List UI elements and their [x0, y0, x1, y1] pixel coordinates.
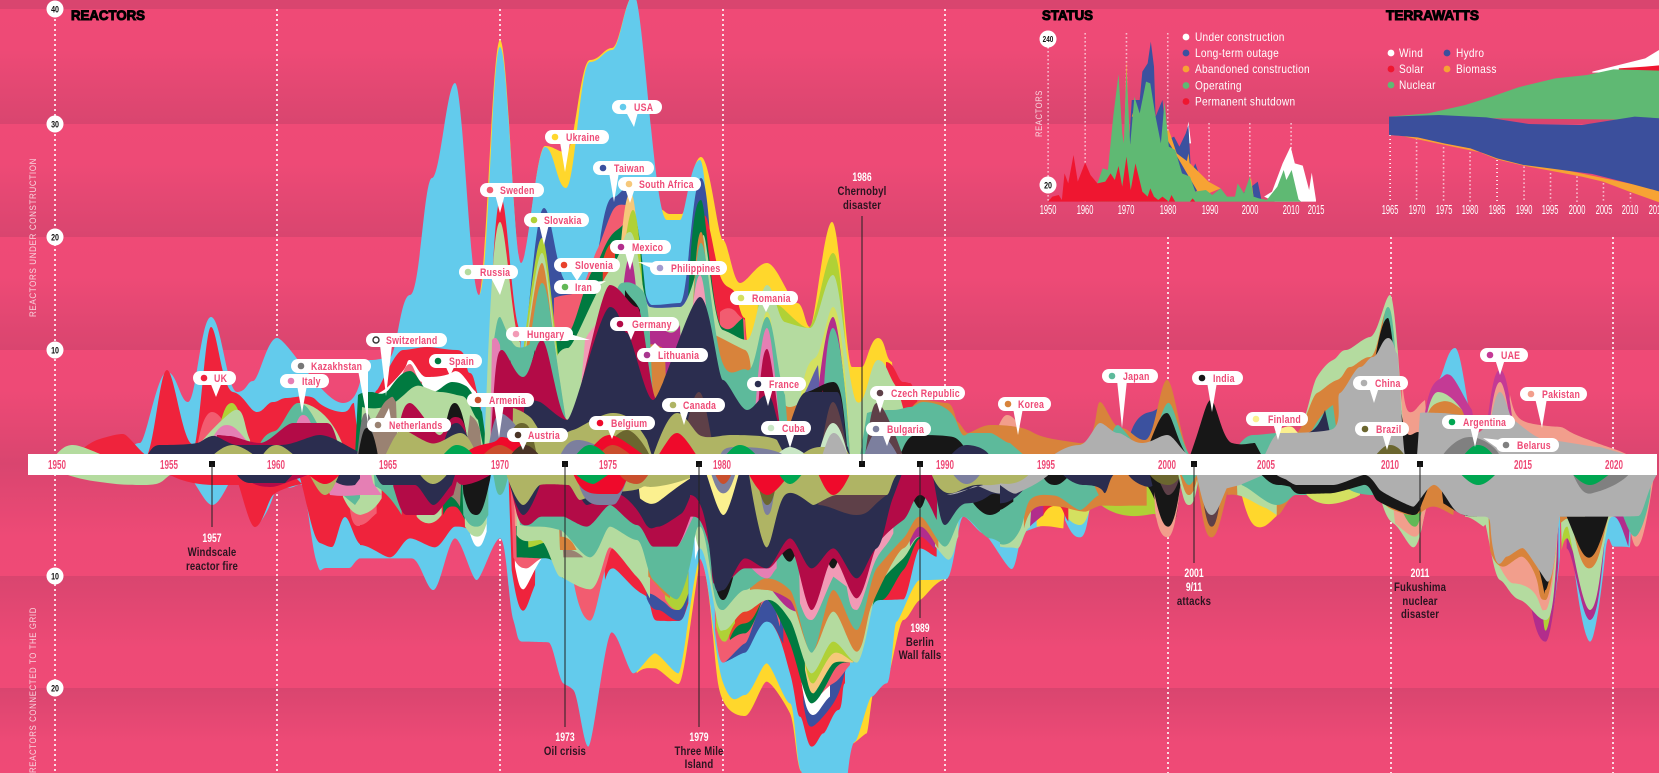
layer: Ukraine — [478, 0, 900, 456]
lower stream, 1979 to 1995 — [690, 470, 1040, 773]
label: Philippines: Philippines — [671, 263, 721, 275]
layer: Finland — [510, 403, 1300, 456]
lower stream, 1995 to 2005 — [1000, 475, 1320, 548]
label: Italy: Italy — [302, 376, 321, 388]
layer: Hungary — [575, 275, 716, 456]
label: Bulgaria — [866, 422, 931, 446]
event: 2011 Fukushima: nuclear — [1402, 595, 1438, 608]
label: Taiwan: Taiwan — [614, 163, 645, 175]
label: Korea — [998, 397, 1051, 435]
label: USA: USA — [634, 102, 653, 114]
terrawatts years: 1970 — [1409, 204, 1426, 218]
layer: Taiwan — [515, 178, 1170, 456]
axis title: under construction: REACTORS UNDER CONSTRUCTION — [28, 158, 38, 317]
terrawatts years: 1965 — [1382, 204, 1399, 218]
timeline years: 1980 — [713, 458, 731, 473]
terrawatts years: 1990 — [1516, 204, 1533, 218]
label: Czech Republic — [870, 386, 965, 413]
label: USA — [612, 100, 662, 127]
timeline years: 1975 — [599, 458, 617, 473]
terrawatts legend: Nuclear — [1399, 79, 1436, 92]
event: 1989 Berlin Wall: Berlin — [906, 636, 934, 649]
label: UK: UK — [214, 373, 228, 385]
terrawatts years: 2010 — [1622, 204, 1639, 218]
layer: Kazakhstan — [357, 413, 376, 456]
label: Japan — [1102, 369, 1158, 428]
layer: Iran — [600, 275, 652, 456]
y axis: 20 — [51, 231, 59, 243]
label: Hungary — [506, 327, 590, 341]
status legend: Abandoned construction — [1195, 63, 1310, 76]
area: under construction — [1185, 122, 1316, 202]
status axis and labels: 2000 — [1242, 204, 1259, 218]
label: Cuba: Cuba — [782, 423, 805, 435]
status legend — [1183, 31, 1310, 109]
terrawatts years: 2000 — [1569, 204, 1586, 218]
label: Slovenia — [554, 258, 620, 281]
event: 2011 Fukushima: disaster — [1401, 608, 1440, 621]
label: Finland — [1246, 412, 1308, 440]
timeline years: 1970 — [491, 458, 509, 473]
country labels — [193, 100, 1587, 452]
timeline years: 1995 — [1037, 458, 1055, 473]
status legend: Under construction — [1195, 31, 1285, 44]
layer: France — [147, 297, 1335, 456]
label: Spain — [429, 354, 482, 376]
event: 1986 Chernobyl: 1986 — [852, 172, 872, 184]
status legend: Long-term outage — [1195, 47, 1279, 60]
event: 2011 Fukushima — [1394, 461, 1447, 621]
label: Philippines — [638, 261, 727, 275]
label: Netherlands: Netherlands — [389, 420, 443, 432]
label: Austria: Austria — [528, 430, 560, 442]
label: France — [747, 377, 806, 406]
terrawatts chart — [1389, 49, 1659, 203]
area: biomass — [1389, 133, 1659, 203]
label: India: India — [1213, 373, 1235, 385]
layer: Bulgaria — [487, 413, 898, 456]
layer: USA — [125, 0, 1476, 456]
label: Kazakhstan: Kazakhstan — [311, 361, 362, 373]
event: 1979 Three Mile Island: 1979 — [689, 732, 709, 744]
status axis and labels: 2015 — [1308, 204, 1325, 218]
layer: Italy — [205, 328, 782, 456]
layer: India — [360, 290, 1432, 456]
status legend: Operating — [1195, 80, 1242, 93]
label: Lithuania — [637, 343, 708, 362]
label: Bulgaria: Bulgaria — [887, 424, 924, 436]
heading: reactors: REACTORS — [71, 7, 145, 23]
label: Russia: Russia — [480, 267, 510, 279]
label: Korea: Korea — [1018, 399, 1044, 411]
layer: UAE — [1420, 370, 1517, 456]
label: Ukraine — [545, 130, 609, 172]
label: Austria — [507, 428, 568, 450]
layer: Pakistan — [985, 380, 1630, 456]
label: Argentina — [1442, 415, 1515, 447]
event: 1957 Windscale — [186, 461, 238, 573]
terrawatts legend: Biomass — [1456, 63, 1497, 76]
label: Brazil — [1355, 422, 1409, 450]
status axis and labels: 1960 — [1077, 204, 1094, 218]
event: 2011 Fukushima: Fukushima — [1394, 581, 1447, 594]
terrawatts years — [1382, 204, 1659, 218]
status axis and labels: 1970 — [1118, 204, 1135, 218]
layer: Belarus — [1442, 437, 1500, 456]
label: South Africa: South Africa — [639, 179, 694, 191]
streamgraph: reactors connected to the grid — [60, 470, 1657, 773]
status axis and labels: 1950 — [1040, 204, 1057, 218]
event: 1989 Berlin Wall — [899, 461, 941, 662]
timeline strip — [28, 454, 1657, 475]
timeline years: 2020 — [1605, 458, 1623, 473]
label: Belarus — [1483, 438, 1559, 452]
layer: Slovenia — [600, 243, 615, 456]
status axis and labels: 20 — [1044, 179, 1052, 191]
label: Spain: Spain — [449, 356, 474, 368]
label: Kazakhstan — [291, 359, 371, 423]
label: Netherlands — [367, 408, 451, 432]
label: Iran — [554, 280, 606, 294]
event: 2001: attacks — [1177, 595, 1211, 608]
layer: Netherlands — [360, 397, 482, 456]
label: Cuba — [761, 421, 811, 448]
event: 2001 — [1177, 461, 1211, 608]
timeline years: 1950 — [48, 458, 66, 473]
y axis: 20 — [51, 682, 59, 694]
layer: Korea — [512, 232, 1472, 456]
label: Pakistan: Pakistan — [1542, 389, 1580, 401]
layer: South Africa — [615, 193, 648, 456]
label: Canada — [662, 398, 725, 425]
terrawatts legend: Wind — [1399, 47, 1423, 60]
label: Russia — [459, 265, 518, 295]
layer: Slovakia — [214, 210, 852, 456]
event: 1973 Oil crisis: Oil crisis — [544, 745, 586, 758]
event: 1973 Oil crisis — [544, 461, 586, 758]
label: China — [1353, 376, 1408, 403]
label: Hungary: Hungary — [527, 329, 565, 341]
label: Mexico: Mexico — [632, 242, 663, 254]
layer: Russia — [55, 222, 1470, 456]
label: Brazil: Brazil — [1376, 424, 1401, 436]
label: Pakistan — [1520, 387, 1587, 428]
event: 1986 Chernobyl — [838, 172, 886, 467]
status axis and labels: 240 — [1043, 34, 1053, 44]
label: Sweden: Sweden — [500, 185, 535, 197]
streamgraph: reactors under construction — [55, 0, 1632, 456]
label: Armenia: Armenia — [489, 395, 526, 407]
label: Ukraine: Ukraine — [566, 132, 600, 144]
event: 2001: 9/11 — [1186, 582, 1202, 594]
area: solar — [1619, 65, 1659, 72]
event: 1989 Berlin Wall: 1989 — [910, 623, 930, 635]
terrawatts years: 1985 — [1489, 204, 1506, 218]
layer: Cuba — [775, 423, 848, 456]
event: 1979 Three Mile Island — [674, 461, 724, 771]
layer: UK — [75, 197, 920, 456]
status legend: Permanent shutdown — [1195, 96, 1295, 109]
label: Argentina: Argentina — [1463, 417, 1506, 429]
label: Czech Republic: Czech Republic — [891, 388, 960, 400]
event: 1973 Oil crisis: 1973 — [555, 732, 575, 744]
label: India — [1192, 371, 1243, 412]
heading: terrawatts: TERRAWATTS — [1386, 7, 1479, 23]
layer: Switzerland — [372, 360, 482, 456]
event: 1989 Berlin Wall: Wall falls — [899, 649, 941, 662]
terrawatts legend: Hydro — [1456, 47, 1484, 60]
layer: China — [1052, 338, 1632, 456]
layer: Sweden — [196, 205, 750, 456]
label: Romania — [730, 291, 798, 312]
timeline years: 1965 — [379, 458, 397, 473]
label: Belgium: Belgium — [611, 418, 647, 430]
area: nuclear — [1389, 69, 1659, 120]
y axis: 10 — [51, 344, 59, 356]
label: Lithuania: Lithuania — [658, 350, 699, 362]
y axis — [46, 0, 64, 696]
heading: status: STATUS — [1042, 7, 1093, 23]
label: Canada: Canada — [683, 400, 716, 412]
terrawatts years: 1995 — [1542, 204, 1559, 218]
status axis and labels: 2010 — [1283, 204, 1300, 218]
layer: Mexico — [615, 257, 850, 456]
event: 1957 Windscale: reactor fire — [186, 560, 238, 573]
terrawatts legend: Solar — [1399, 63, 1424, 76]
label: UAE: UAE — [1501, 350, 1520, 362]
event: 1986 Chernobyl: Chernobyl — [838, 185, 886, 198]
label: South Africa — [618, 177, 701, 203]
label: Iran: Iran — [575, 282, 592, 294]
lower stream, 2005 to 2020 — [1280, 475, 1657, 642]
label: Germany: Germany — [632, 319, 672, 331]
label: Belarus: Belarus — [1517, 440, 1551, 452]
timeline years: 2000 — [1158, 458, 1176, 473]
area: abandoned construction — [1124, 60, 1254, 197]
status axis and labels: REACTORS — [1034, 90, 1044, 137]
timeline years: 2005 — [1257, 458, 1275, 473]
layer: Romania — [755, 307, 850, 456]
label: France: France — [769, 379, 799, 391]
layer: Philippines — [795, 365, 825, 456]
status axis and labels — [1034, 30, 1325, 218]
event: 1979 Three Mile Island: Three Mile — [674, 745, 724, 758]
status chart — [1048, 33, 1316, 202]
event: 2001: 2001 — [1184, 568, 1204, 580]
layer: Austria — [505, 423, 650, 456]
label: Switzerland: Switzerland — [386, 335, 438, 347]
timeline years: 1960 — [267, 458, 285, 473]
label: Switzerland — [366, 333, 447, 396]
area: hydro — [1389, 115, 1659, 192]
label: Belgium — [589, 416, 655, 439]
axis title: connected to the grid: REACTORS CONNECTED TO THE GRID — [28, 607, 38, 773]
status axis and labels: 1980 — [1160, 204, 1177, 218]
label: Romania: Romania — [752, 293, 791, 305]
area: wind — [1592, 49, 1659, 73]
event: 1979 Three Mile Island: Island — [685, 758, 713, 771]
layer: Argentina — [442, 445, 1494, 456]
area: long-term outage — [1129, 42, 1261, 200]
area: permanent shutdown — [1048, 155, 1195, 202]
layer: Spain — [396, 364, 425, 456]
y axis: 30 — [51, 118, 59, 130]
terrawatts years: 1975 — [1436, 204, 1453, 218]
event: 1957 Windscale: 1957 — [202, 533, 222, 545]
layer: Czech Republic — [680, 392, 903, 456]
label: Sweden — [480, 183, 544, 213]
layer: Germany — [215, 285, 825, 456]
timeline years: 2015 — [1514, 458, 1532, 473]
timeline years: 1990 — [936, 458, 954, 473]
label: Taiwan — [593, 161, 654, 202]
label: Slovakia: Slovakia — [544, 215, 582, 227]
layer: Japan — [255, 243, 1402, 456]
timeline years — [48, 458, 1623, 473]
area: operating — [1097, 70, 1301, 202]
event: 2011 Fukushima: 2011 — [1411, 568, 1430, 580]
event: 1957 Windscale: Windscale — [188, 546, 236, 559]
label: UK — [193, 371, 236, 397]
timeline years: 1955 — [160, 458, 178, 473]
label: Germany — [610, 317, 679, 340]
label: Slovenia: Slovenia — [575, 260, 613, 272]
event: 1986 Chernobyl: disaster — [843, 199, 882, 212]
label: China: China — [1375, 378, 1401, 390]
label: Japan: Japan — [1123, 371, 1150, 383]
terrawatts years: 2005 — [1596, 204, 1613, 218]
label: Armenia — [467, 393, 534, 438]
status axis and labels: 1990 — [1202, 204, 1219, 218]
layer: Brazil — [1375, 445, 1405, 456]
label: Italy — [280, 374, 329, 413]
lower stream, 1965 to 1979 — [360, 470, 710, 747]
layer: Canada — [212, 408, 850, 456]
timeline years: 2010 — [1381, 458, 1399, 473]
label: UAE — [1480, 348, 1528, 375]
lower stream, 1950 to 1965 — [60, 472, 365, 570]
y axis: 10 — [51, 570, 59, 582]
y axis: 40 — [51, 3, 59, 15]
label: Slovakia — [524, 213, 589, 245]
label: Mexico — [610, 240, 671, 270]
terrawatts legend — [1388, 47, 1497, 92]
label: Finland: Finland — [1268, 414, 1301, 426]
terrawatts years: 1980 — [1462, 204, 1479, 218]
